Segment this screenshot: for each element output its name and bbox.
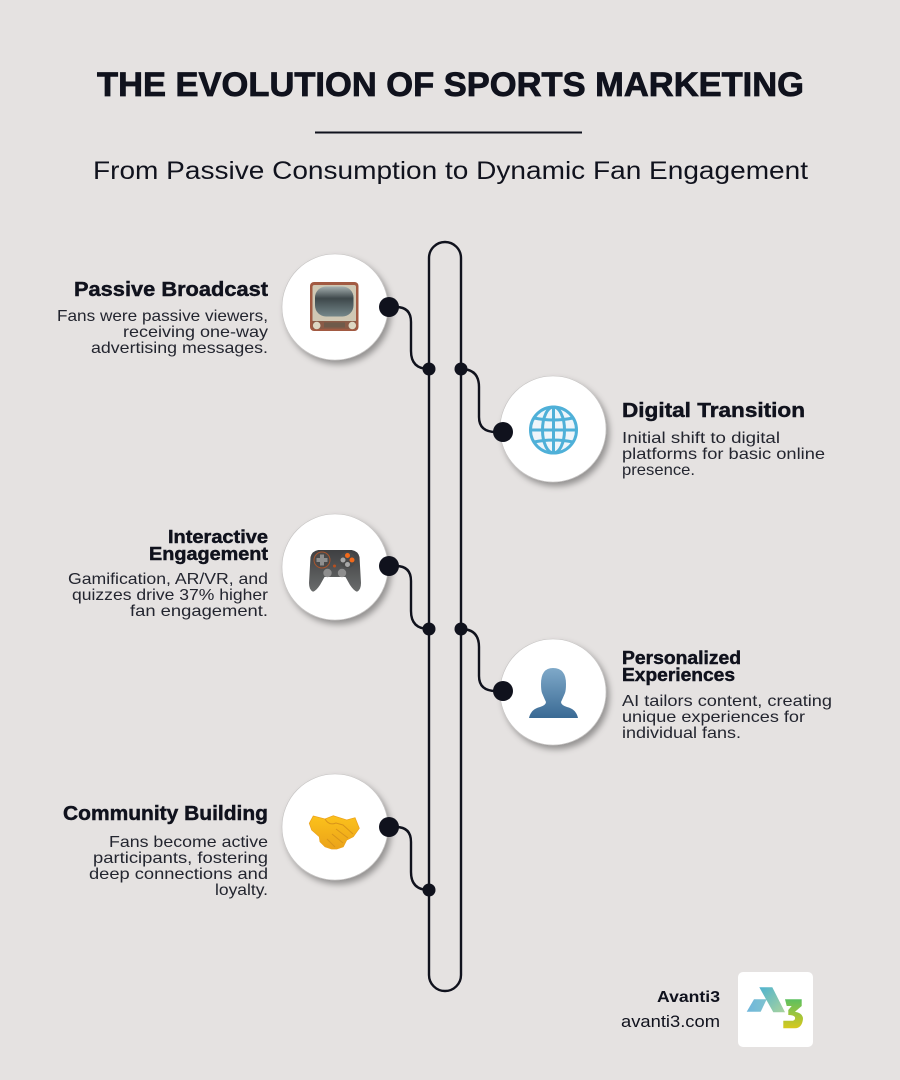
heading: personalized experiences: Personalized — [622, 648, 741, 668]
brand name: Avanti3 — [657, 989, 720, 1006]
heading: passive broadcast: Passive Broadcast — [74, 279, 268, 301]
footer: brand — [621, 972, 813, 1047]
connector: personalized experiences — [454, 622, 503, 691]
text block: digital transition: platforms for basic online — [622, 446, 825, 463]
central timeline track — [429, 242, 461, 991]
connector: passive broadcast — [389, 307, 436, 376]
text block: personalized experiences: AI tailors content, creating — [622, 693, 832, 710]
icon: globe — [500, 376, 606, 482]
heading: personalized experiences: Experiences — [622, 665, 735, 685]
subtitle: From Passive Consumption to Dynamic Fan Engagement — [93, 157, 808, 185]
text block: passive broadcast — [57, 308, 268, 357]
icon: Avanti3 logo — [738, 972, 813, 1047]
text block: interactive engagement — [68, 571, 269, 620]
text block: interactive engagement: fan engagement. — [130, 603, 268, 620]
text block: interactive engagement: Gamification, AR/VR, and — [68, 571, 268, 588]
heading: community building: Community Building — [63, 803, 268, 825]
text block: passive broadcast: receiving one-way — [123, 324, 268, 341]
connector dot: interactive engagement — [379, 556, 399, 576]
connector: community building — [389, 827, 436, 896]
heading: interactive engagement: Interactive — [168, 527, 268, 547]
text block: digital transition: Initial shift to digital — [622, 430, 780, 447]
icon: handshake — [282, 774, 388, 880]
panel: personalized experiences — [493, 639, 832, 745]
text block: passive broadcast: Fans were passive viewers, — [57, 308, 268, 325]
connector dot: passive broadcast — [379, 297, 399, 317]
panel: passive broadcast — [57, 254, 399, 360]
heading: personalized experiences — [622, 648, 741, 685]
text block: personalized experiences: individual fans. — [622, 725, 741, 742]
panel: community building — [63, 774, 399, 899]
text block: digital transition: presence. — [622, 462, 695, 479]
text block: interactive engagement: quizzes drive 37% higher — [72, 587, 269, 604]
heading: digital transition: Digital Transition — [622, 400, 805, 422]
text block: community building: participants, fostering — [93, 850, 268, 867]
panel: interactive engagement — [68, 514, 399, 620]
text block: community building: Fans become active — [109, 834, 268, 851]
connector: interactive engagement — [389, 566, 436, 636]
heading: interactive engagement — [149, 527, 268, 564]
title: THE EVOLUTION OF SPORTS MARKETING — [97, 66, 804, 104]
connector dot: personalized experiences — [493, 681, 513, 701]
connector dot: digital transition — [493, 422, 513, 442]
text block: community building: deep connections and — [89, 866, 268, 883]
text block: community building — [89, 834, 268, 899]
text block: community building: loyalty. — [215, 882, 268, 899]
text block: personalized experiences — [622, 693, 832, 742]
connector dot: community building — [379, 817, 399, 837]
text block: passive broadcast: advertising messages. — [91, 340, 268, 357]
brand url: avanti3.com — [621, 1013, 720, 1031]
text block: personalized experiences: unique experiences for — [622, 709, 806, 726]
icon: person silhouette — [500, 639, 606, 745]
connector: digital transition — [454, 362, 503, 432]
heading: interactive engagement: Engagement — [149, 544, 268, 564]
panel: digital transition — [493, 376, 825, 482]
icon: television — [282, 254, 388, 360]
icon: game controller — [282, 514, 388, 620]
text block: digital transition — [622, 430, 825, 479]
